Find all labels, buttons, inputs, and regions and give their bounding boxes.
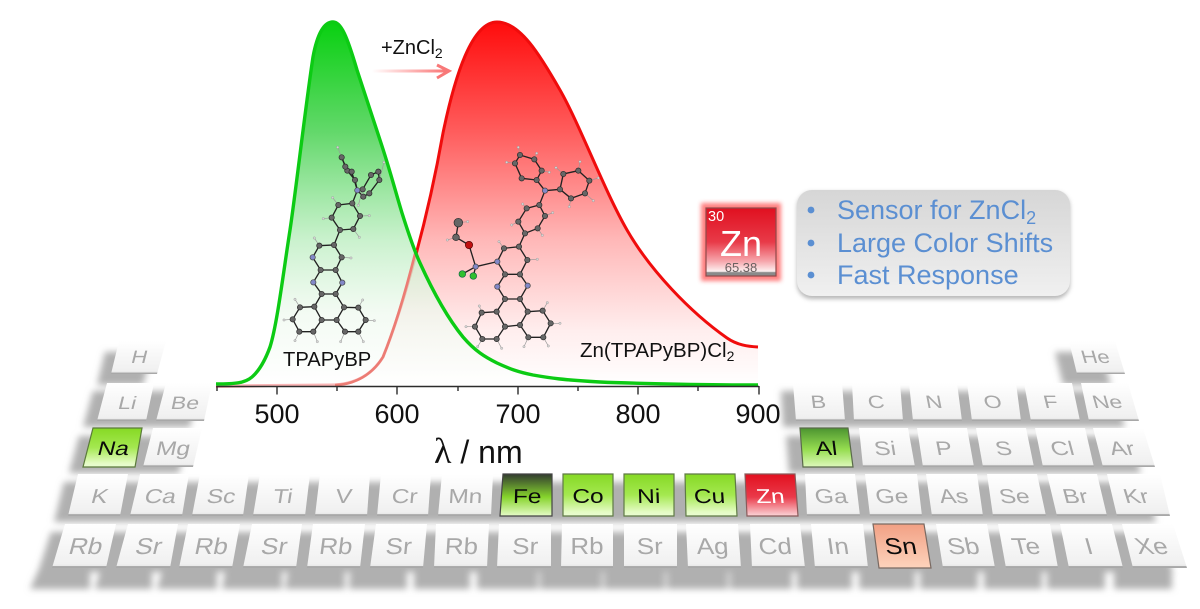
tile: He — [1069, 341, 1125, 374]
tile: Sr — [243, 524, 302, 568]
tile: Ga — [805, 474, 860, 516]
tile: Na highlighted — [83, 428, 142, 467]
tile: O — [967, 383, 1021, 421]
tile: Cu highlighted: Cu — [693, 485, 726, 507]
tick label 900: 900 — [735, 399, 781, 429]
tick label 500: 500 — [254, 399, 300, 429]
tile: I: I — [1082, 534, 1096, 560]
red emission curve — [216, 22, 758, 386]
atomic number: 30 — [708, 209, 724, 225]
tile: Sr — [370, 524, 427, 568]
tile: S — [976, 428, 1034, 467]
tile: Li: Li — [116, 394, 139, 413]
tile: Mg: Mg — [154, 437, 193, 459]
tile: In — [811, 524, 868, 568]
tile: Sc: Sc — [205, 485, 238, 507]
tile: Rb — [179, 524, 240, 568]
tile: As: As — [937, 485, 970, 507]
tile: V — [315, 474, 370, 516]
tile: Rb — [434, 524, 489, 568]
tile: V: V — [334, 485, 353, 507]
pale red curve seen through green area — [335, 250, 416, 385]
tile: Ti: Ti — [272, 485, 295, 507]
tile: Sr — [497, 524, 551, 568]
tile: Zn highlighted: Zn — [755, 485, 786, 507]
tile: Ni highlighted: Ni — [637, 485, 661, 507]
bullet: Fast Response: Fast Response — [837, 260, 1019, 290]
tick label 700: 700 — [495, 399, 541, 429]
tile: Ge: Ge — [874, 485, 910, 507]
symbol: Zn — [720, 223, 762, 264]
tile: Rb — [307, 524, 365, 568]
tick label 600: 600 — [374, 399, 420, 429]
bullet: Large Color Shifts: Large Color Shifts — [837, 228, 1053, 258]
tile: Rb: Rb — [192, 535, 231, 560]
tile: K: K — [89, 484, 111, 507]
tile: Sc — [192, 474, 249, 516]
tick label 800: 800 — [615, 399, 661, 429]
tile: Te — [998, 524, 1058, 568]
reagent label: 2 — [435, 45, 443, 61]
tile: Sr — [624, 524, 677, 568]
tile: C — [852, 383, 903, 421]
tile: In: In — [825, 534, 851, 560]
label: TPAPyBP: TPAPyBP — [283, 349, 371, 371]
tile: Li — [97, 383, 154, 421]
tile: Cu highlighted — [685, 474, 737, 516]
tile: Na highlighted: Na — [95, 438, 133, 459]
arrow — [372, 65, 449, 78]
tile: Mn: Mn — [448, 485, 483, 507]
tile: B: B — [809, 392, 827, 412]
green emission curve — [216, 22, 758, 385]
tile: F — [1024, 383, 1080, 421]
molecule: TPAPyBP — [283, 146, 385, 343]
tile: Zn highlighted — [745, 474, 798, 516]
tile: Rb: Rb — [66, 534, 106, 560]
tile: Cd: Cd — [757, 534, 793, 560]
x axis with ticks — [216, 386, 759, 394]
tile: O: O — [981, 392, 1004, 412]
tile: Sr: Sr — [636, 534, 663, 560]
label: Zn(TPAPyBP)Cl2: Zn(TPAPyBP)Cl — [580, 339, 727, 362]
tile: Mg — [143, 428, 202, 467]
tile: B — [793, 383, 845, 421]
tile: F: F — [1041, 393, 1060, 412]
green emission area: TPAPyBP — [216, 22, 758, 386]
Zn element card — [701, 203, 781, 281]
reagent label: +ZnCl — [381, 37, 435, 59]
tile: N — [909, 383, 962, 421]
tile: Al highlighted: Al — [814, 437, 838, 459]
red emission area: Zn(TPAPyBP)Cl2 — [216, 22, 758, 386]
tile: Cr: Cr — [391, 485, 419, 507]
tile: Cl — [1035, 428, 1094, 467]
tile: Co highlighted: Co — [572, 485, 604, 507]
tile: Ar: Ar — [1106, 438, 1138, 459]
tile: Sr: Sr — [259, 534, 289, 560]
feature panel — [797, 190, 1070, 299]
tile: Ni highlighted — [624, 474, 674, 516]
tile: Ti — [253, 474, 310, 516]
tile: Co highlighted — [563, 474, 613, 516]
tile: Sr: Sr — [384, 534, 413, 560]
tile: C: C — [866, 392, 886, 412]
tile: P — [917, 428, 974, 467]
tile: Rb — [561, 524, 613, 568]
tile: Sb — [936, 524, 995, 568]
tile: Ne: Ne — [1090, 393, 1125, 412]
tile: As — [926, 474, 983, 516]
tile: He: He — [1078, 347, 1112, 367]
tile: Rb: Rb — [570, 534, 604, 560]
tile: Sn highlighted — [873, 524, 931, 568]
tile: Se — [987, 474, 1046, 516]
tile: S: S — [993, 438, 1014, 459]
tile shadows — [30, 352, 1173, 589]
tile: Sr: Sr — [512, 534, 539, 560]
tile: K — [68, 474, 128, 516]
tile: N: N — [924, 392, 944, 412]
tile: Ca — [130, 474, 189, 516]
tile: Fe highlighted: Fe — [513, 485, 542, 507]
tile: Ag: Ag — [696, 534, 729, 560]
tile: Br: Br — [1060, 484, 1091, 507]
axis title: λ / nm — [434, 431, 523, 471]
tile: Si — [859, 428, 915, 467]
tile: Rb: Rb — [318, 534, 354, 560]
emission spectra chart — [216, 22, 781, 471]
tile: Xe: Xe — [1132, 534, 1172, 559]
tile: Br — [1047, 474, 1107, 516]
tile: Ne — [1081, 383, 1139, 421]
tile: Sn highlighted: Sn — [883, 535, 919, 560]
tile: Ar — [1093, 428, 1155, 467]
tile: Ag — [686, 524, 741, 568]
tile: Mn — [438, 474, 493, 516]
tile: Rb: Rb — [444, 534, 479, 560]
tile: Kr: Kr — [1120, 485, 1152, 507]
tile: Xe — [1122, 524, 1187, 568]
periodic table — [30, 341, 1187, 589]
tile: Fe highlighted — [500, 474, 552, 516]
tile: H: H — [129, 348, 150, 367]
bullet: Sensor for ZnCl2: 2 — [1026, 208, 1036, 228]
tile: Rb — [52, 524, 116, 568]
tile: Sr: Sr — [133, 535, 165, 560]
tile: Sb: Sb — [945, 535, 982, 560]
tile: P: P — [933, 437, 954, 459]
tile: Si: Si — [872, 437, 898, 459]
bullet: Sensor for ZnCl2: Sensor for ZnCl — [837, 195, 1026, 225]
tile: Kr — [1107, 474, 1170, 516]
tile: Cd — [750, 524, 805, 568]
tile: Ga: Ga — [813, 485, 849, 507]
tile: Cr — [377, 474, 431, 516]
molecule: Zn(TPAPyBP)Cl2 — [446, 146, 600, 350]
tile: Ge — [865, 474, 922, 516]
label: Zn(TPAPyBP)Cl2: 2 — [727, 348, 735, 364]
tile: Be: Be — [169, 393, 201, 413]
tile: Te: Te — [1009, 535, 1043, 560]
tile: Sr — [116, 524, 178, 568]
tile: Cl: Cl — [1048, 438, 1077, 459]
atomic mass: 65.38 — [725, 260, 757, 275]
tile: H — [111, 341, 166, 374]
tile: Be — [156, 383, 212, 421]
tile: Se: Se — [997, 484, 1032, 507]
tile: I — [1060, 524, 1123, 568]
tile: Al highlighted — [800, 428, 853, 467]
tile: Ca: Ca — [142, 485, 179, 507]
